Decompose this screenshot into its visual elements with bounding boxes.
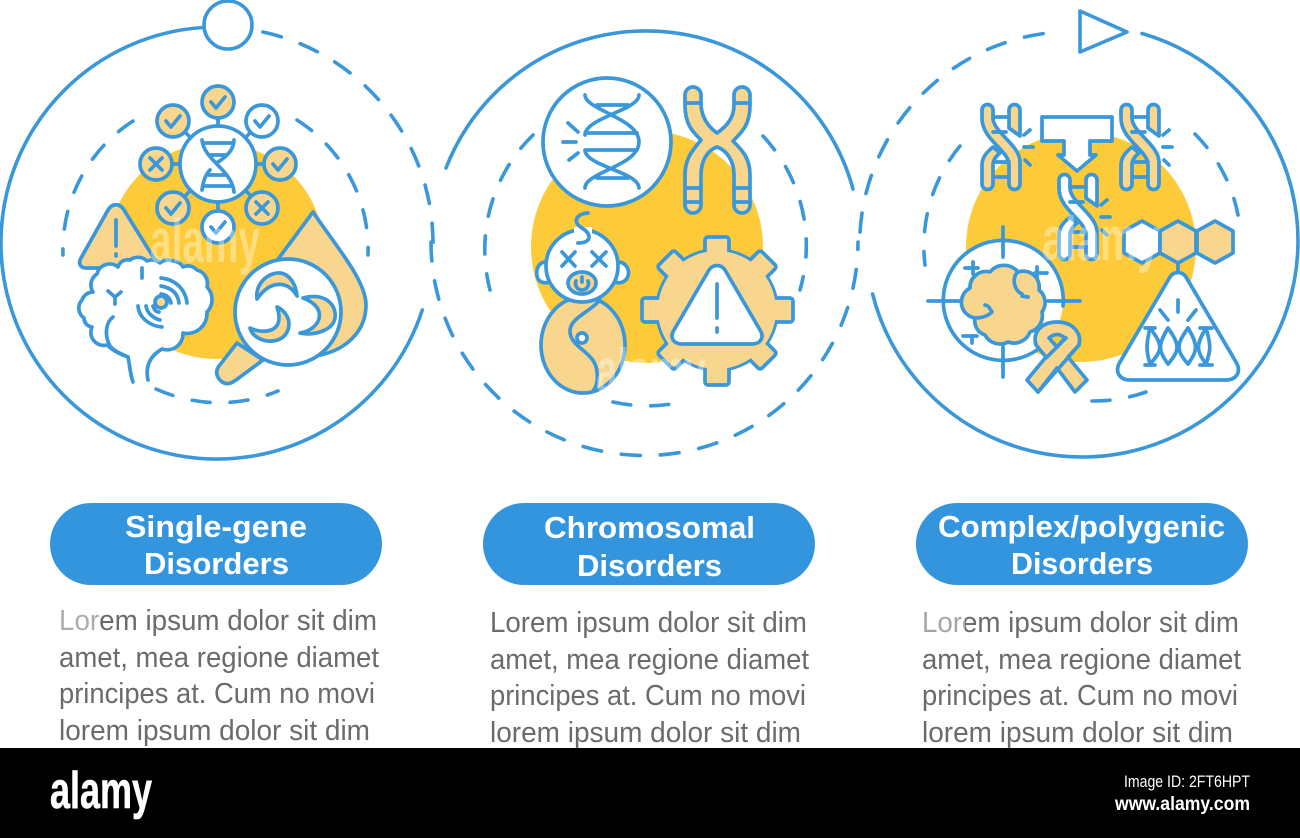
icon: DNA in circle	[543, 78, 671, 206]
watermark: alamy	[1042, 205, 1160, 274]
watermark: alamy	[596, 337, 706, 406]
outer ring: right	[860, 11, 1298, 457]
icon: baby	[537, 213, 629, 393]
text block: left: principes at. Cum no movi	[59, 678, 375, 710]
icon: funnel arrow	[1042, 117, 1112, 171]
icon: warning triangle with DNA	[1118, 272, 1238, 380]
text block: right: Lorem ipsum dolor sit dim	[922, 607, 1239, 639]
footer bar	[0, 748, 1300, 838]
icon: molecule hexagons	[1124, 221, 1233, 275]
heading pill: complex/polygenic	[916, 503, 1248, 585]
icon: genes network	[140, 86, 296, 243]
icon: warning triangle	[80, 205, 160, 268]
text block: left: lorem ipsum dolor sit dim	[59, 715, 370, 747]
icon: damaged DNA strands	[982, 104, 1172, 260]
watermark: alamy	[150, 207, 260, 276]
footer bar: alamy	[50, 762, 152, 820]
panel: single-gene disorders	[1, 1, 433, 459]
yellow disc: left	[108, 143, 324, 359]
text block: right: amet, mea regione diamet	[922, 644, 1241, 676]
panel: chromosomal disorders	[431, 31, 858, 455]
heading pill: single-gene: Single-gene	[125, 509, 307, 544]
icon: drop and magnifier	[217, 212, 366, 384]
text block: middle: principes at. Cum no movi	[490, 680, 806, 712]
icon: brain	[79, 257, 212, 382]
text block: right	[921, 607, 1241, 749]
outer ring: middle	[431, 31, 858, 455]
text block: left: Lorem ipsum dolor sit dim	[59, 605, 377, 637]
text block: middle: lorem ipsum dolor sit dim	[490, 717, 801, 749]
inner dashed ring: middle	[485, 135, 806, 406]
text block: right: lorem ipsum dolor sit dim	[922, 717, 1233, 749]
text block: right: principes at. Cum no movi	[922, 680, 1238, 712]
yellow disc: middle	[531, 131, 763, 363]
text block: middle: Lorem ipsum dolor sit dim	[490, 607, 807, 639]
heading pill: complex/polygenic: Disorders	[1011, 546, 1153, 581]
heading pill: single-gene	[50, 503, 382, 585]
footer bar: Image ID: 2FT6HPT	[1124, 772, 1250, 791]
heading pill: chromosomal	[483, 503, 815, 585]
footer bar: www.alamy.com	[1114, 794, 1250, 815]
icon: chromosome	[685, 87, 750, 213]
icon: gear with warning	[642, 237, 793, 385]
heading pill: complex/polygenic: Complex/polygenic	[938, 509, 1225, 544]
heading pill: chromosomal: Disorders	[577, 548, 722, 583]
text block: middle: amet, mea regione diamet	[490, 644, 809, 676]
outer ring: left	[1, 1, 433, 459]
text block: left: amet, mea regione diamet	[59, 642, 379, 674]
inner dashed ring: right	[924, 134, 1238, 401]
panel: complex/polygenic disorders	[860, 11, 1298, 457]
icon: awareness ribbon	[1027, 322, 1087, 392]
heading pill: chromosomal: Chromosomal	[544, 510, 755, 545]
inner dashed ring: left	[63, 120, 368, 403]
heading pill: single-gene: Disorders	[144, 546, 289, 581]
text block: middle	[490, 607, 809, 749]
text block: left	[58, 605, 379, 747]
yellow disc: right	[966, 132, 1196, 362]
icon: tumor target	[928, 227, 1080, 377]
